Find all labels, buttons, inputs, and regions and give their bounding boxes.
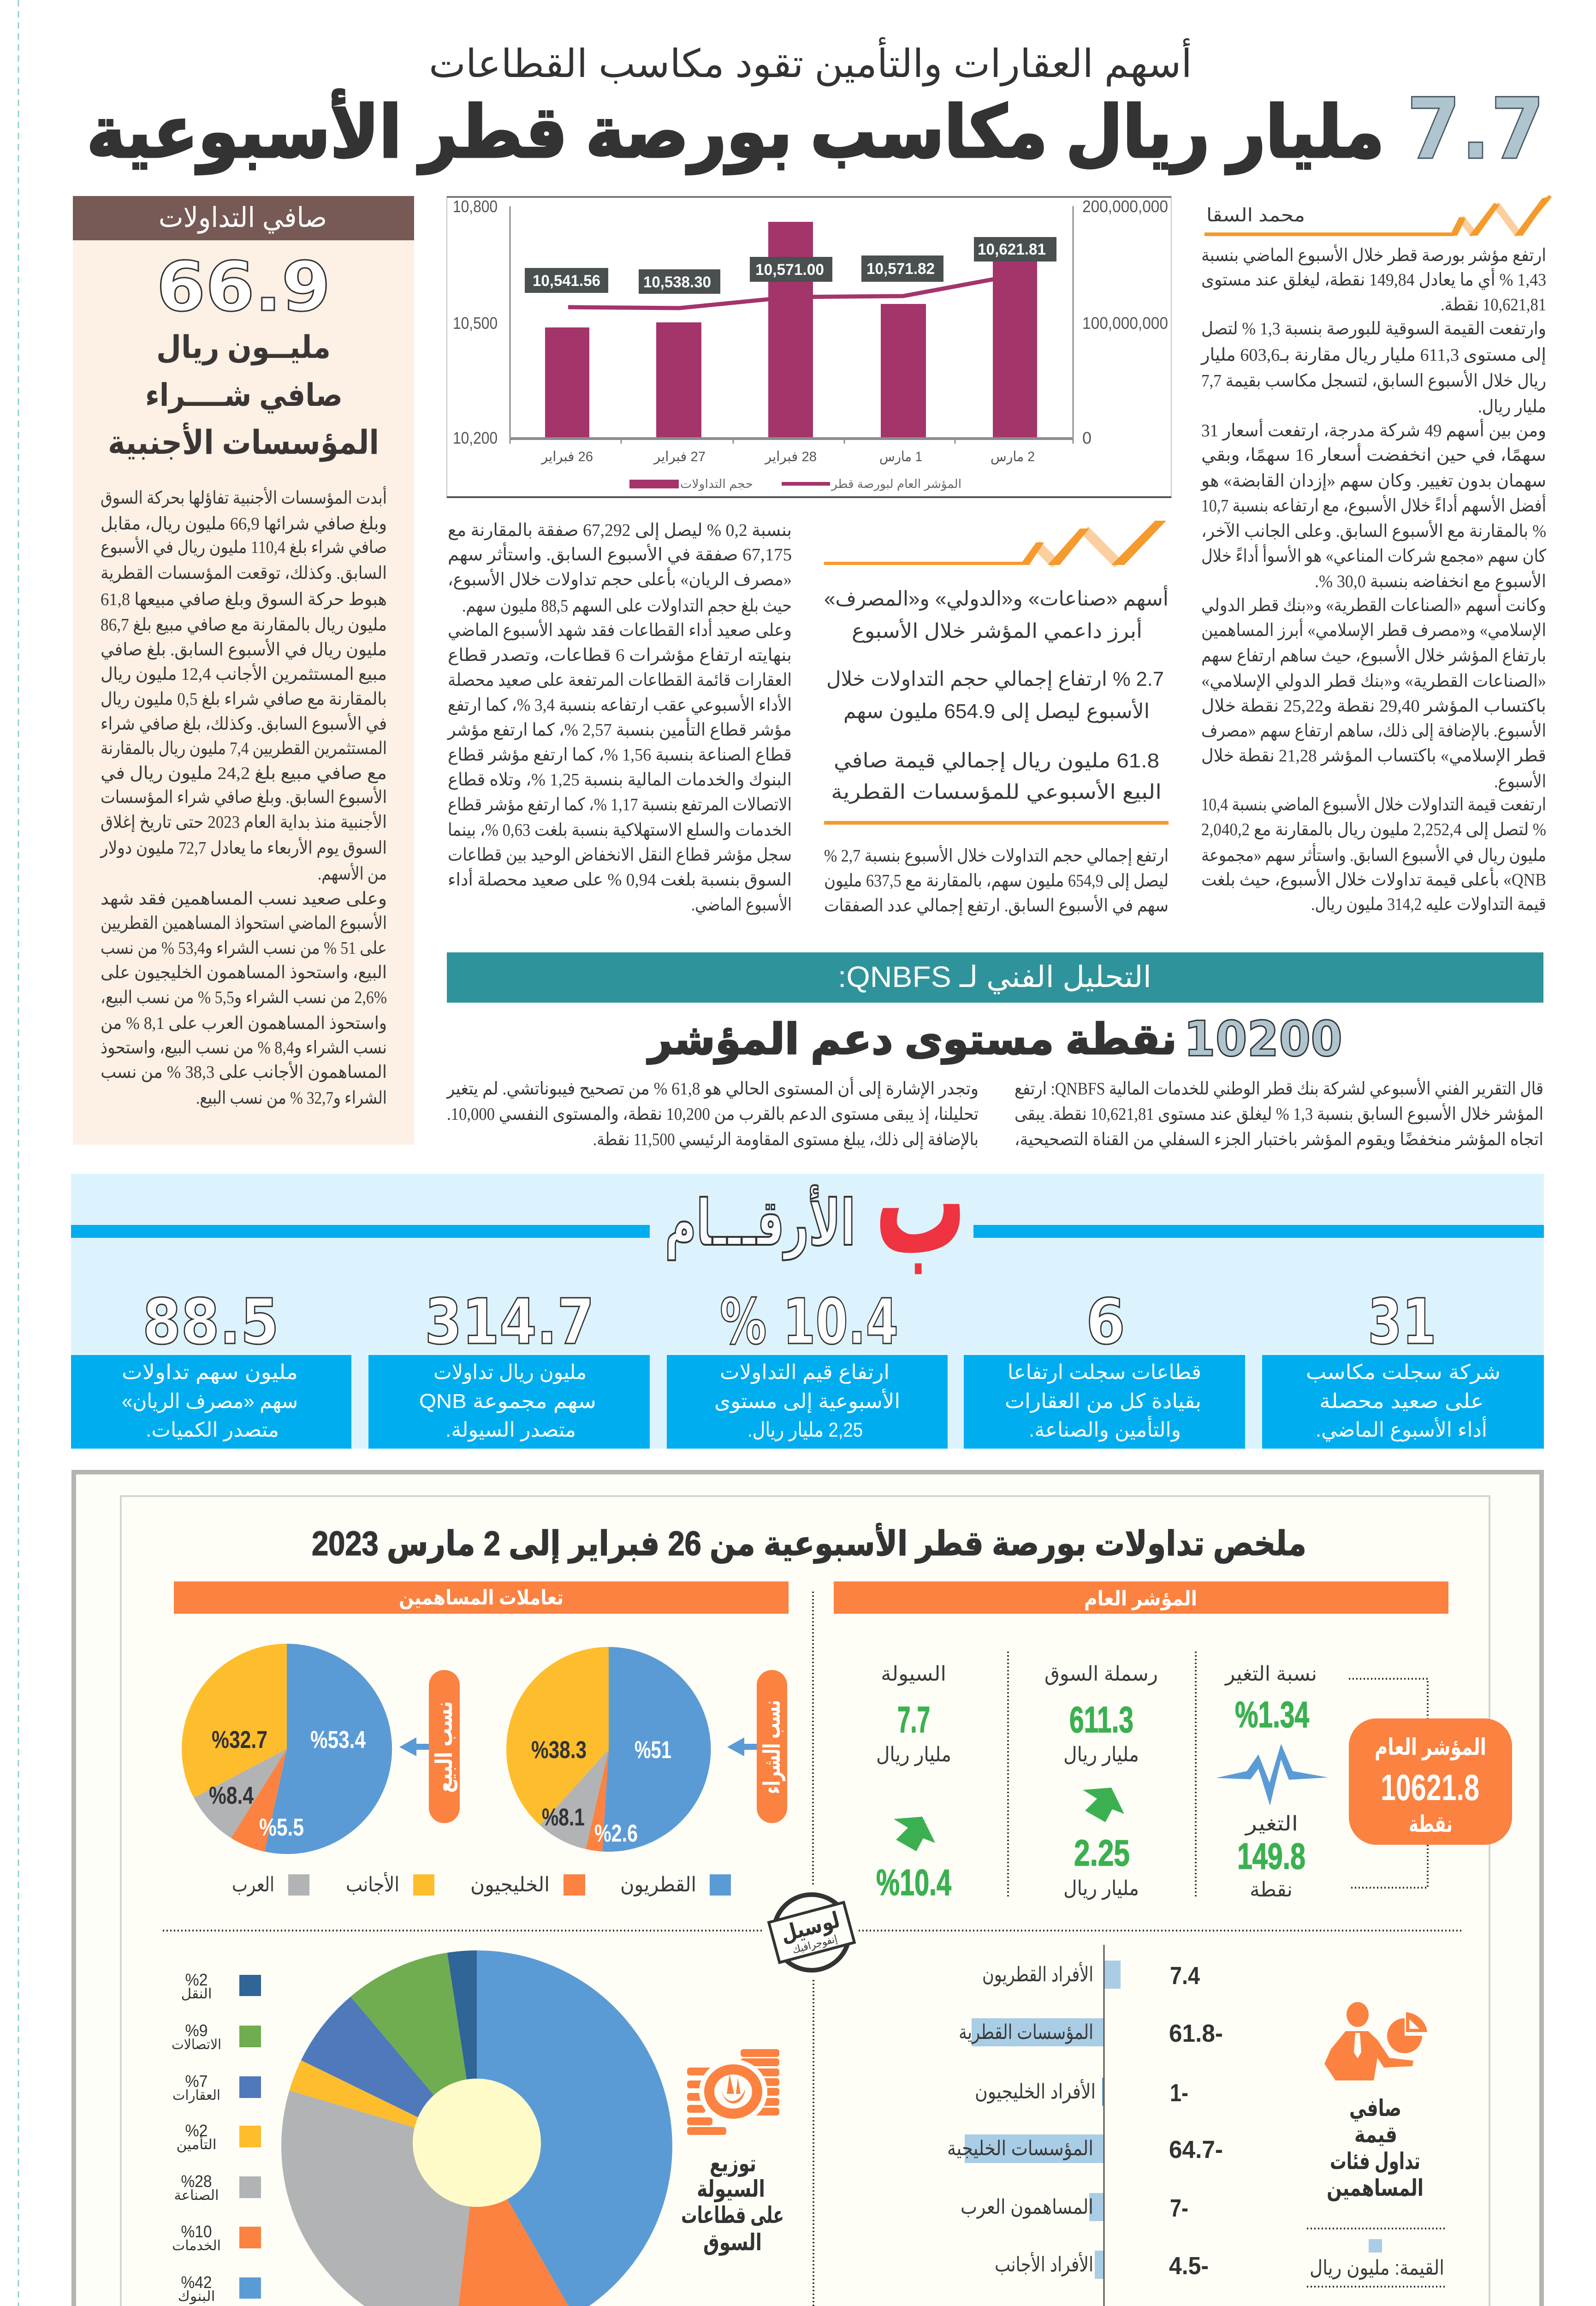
- stat numbers: % 10.4: [720, 1286, 898, 1359]
- donut caption: على قطاعات: [681, 2202, 784, 2228]
- donut caption: توزيع: [710, 2151, 756, 2177]
- main article text: باكتساب المؤشر 29,40 نقطة و25,22 نقطة خلال: [1201, 696, 1546, 716]
- column tail text: ليصل إلى 654,9 مليون سهم، بالمقارنة مع 637,5 مليون: [824, 871, 1169, 891]
- row values: 4.5-: [1169, 2252, 1209, 2280]
- main article text: مليار ريال.: [1478, 397, 1546, 416]
- donut legend: الاتصالات: [172, 2037, 221, 2052]
- arrow: buy shares: [727, 1737, 757, 1756]
- column: mid left text: البنوك والخدمات المالية بنسبة 1,25 %، وتلاه قطاع: [448, 770, 792, 790]
- column: mid left text: بنسبة 0,2 % ليصل إلى 67,292 صفقة بالمقارنة مع: [448, 521, 792, 541]
- analysis text: اتجاه المؤشر منخفضًا ويقوم المؤشر باختبار الجزء السفلي من القناة التصحيحية،: [1015, 1130, 1543, 1150]
- metric: market cap: 2.25: [1074, 1832, 1130, 1873]
- sidebar body text: واستحوذ المساهمون العرب على 8,1 % من: [101, 1014, 387, 1034]
- teal banner: [447, 952, 1543, 1003]
- row labels: المساهمون العرب: [961, 2196, 1093, 2219]
- main article text: % بالمقارنة مع الأسبوع السابق. وعلى الجانب الآخر،: [1201, 520, 1546, 541]
- row values: 1-: [1170, 2079, 1188, 2107]
- sidebar body text: بالمقارنة مع صافي شراء بلغ 0,5 مليون ريال: [101, 689, 387, 709]
- metric: change: 149.8: [1237, 1836, 1305, 1877]
- row values: 7.4: [1170, 1962, 1200, 1990]
- sidebar body text: الأسبوع السابق. وبلغ صافي شراء المؤسسات: [101, 786, 387, 808]
- sidebar body text: المساهمون الأجانب على 38,3 % من نسب: [101, 1061, 387, 1082]
- pie chart: buy shares: %51: [635, 1736, 671, 1764]
- donut legend: %7: [185, 2072, 208, 2091]
- section: by the numbers: [71, 1118, 1544, 1449]
- section: technical analysis: [446, 952, 1543, 1150]
- sidebar body text: الأسبوع الماضي استحواذ المساهمين القطريين: [101, 912, 387, 933]
- column: mid left text: حيث بلغ حجم التداولات على السهم 88,5 مليون سهم.: [462, 596, 792, 616]
- sidebar body text: صافي شراء بلغ 110,4 مليون ريال في الأسبوع: [101, 536, 387, 558]
- section title: [665, 1118, 967, 1284]
- pie chart: sell shares: %53.4: [310, 1726, 366, 1753]
- bar chart: net trading by shareholder class: [947, 1945, 1388, 2306]
- donut legend: العقارات: [172, 2088, 220, 2103]
- bar chart caption: المساهمين: [1327, 2175, 1424, 2202]
- main article text: وكانت أسهم «الصناعات القطرية» و«بنك قطر الدولي: [1201, 594, 1546, 616]
- donut legend: الصناعة: [174, 2188, 219, 2203]
- icon: businessman with pie chart: [1324, 2002, 1427, 2080]
- column tail text: [824, 844, 1169, 916]
- column: mid left text: «مصرف الريان» بأعلى حجم تداولات خلال الأسبوع،: [448, 567, 792, 590]
- bars: [965, 1961, 1388, 2306]
- column: mid left text: [447, 521, 792, 915]
- main article text: إلى مستوى 611,3 مليار ريال مقارنة بـ603,6 مليار: [1200, 345, 1546, 365]
- pie chart: sell shares: [182, 1644, 392, 1854]
- axis labels: 10,500: [453, 314, 498, 333]
- main article text: ارتفعت قيمة التداولات خلال الأسبوع الماضي بنسبة 10,4: [1201, 793, 1546, 815]
- analysis text: [446, 1077, 1543, 1150]
- chart legend: [629, 477, 961, 491]
- analysis text: المؤشر خلال الأسبوع السابق بنسبة 1,3 % ليغلق عند مستوى 10,621,81 نقطة. يبقى: [1015, 1103, 1543, 1124]
- donut legend: الخدمات: [172, 2238, 221, 2253]
- bar chart caption: صافي: [1349, 2095, 1401, 2122]
- main article text: الأسبوع.: [1494, 770, 1546, 792]
- main article text: كان سهم «مجمع شركات المناعي» هو الأسوأ أداءً خلال: [1201, 544, 1547, 566]
- row labels: الأفراد القطريون: [982, 1961, 1093, 1986]
- column tail text: سهم في الأسبوع السابق. ارتفع إجمالي عدد الصفقات: [824, 894, 1169, 916]
- stat box 88.5: متصدر الكميات.: [146, 1419, 279, 1442]
- callout: general index: [1349, 1718, 1512, 1845]
- pill: buy shares: نسب الشراء: [759, 1700, 786, 1794]
- row values: [1169, 1962, 1229, 2306]
- volume bars: [545, 222, 1037, 437]
- metric: liquidity: مليار ريال: [876, 1743, 951, 1766]
- stat box 314.7: سهم مجموعة QNB: [419, 1390, 596, 1413]
- pie legend: القطريون: [620, 1873, 696, 1896]
- value labels: 10,571.82: [866, 260, 935, 278]
- row values: 7-: [1170, 2194, 1188, 2222]
- pie legend: الخليجيون: [470, 1873, 550, 1896]
- icon: up arrow: [1083, 1788, 1124, 1822]
- main article text: 1,43 % أي ما يعادل 149,84 نقطة، ليغلق عند مستوى: [1201, 268, 1546, 290]
- stat box 10.4: [667, 1355, 948, 1449]
- stat box 6: [964, 1355, 1245, 1449]
- sidebar header: صافي التداولات: [159, 202, 327, 234]
- stat box 6: بقيادة كل من العقارات: [1005, 1390, 1201, 1413]
- pie chart: buy shares: %38.3: [531, 1736, 587, 1764]
- column: mid left text: مؤشر قطاع التأمين بنسبة 2,57 %، كما ارتفع مؤشر: [447, 718, 792, 740]
- sidebar body text: أبدت المؤسسات الأجنبية تفاؤلها بحركة السوق: [101, 486, 387, 508]
- sidebar body text: مليون ريال بالمقارنة مع صافي مبيع بلغ 86,7: [101, 615, 387, 635]
- row labels: المؤسسات الخليجية: [947, 2137, 1093, 2160]
- sidebar body text: على 51 % من نسب الشراء و53,4 % من نسب: [101, 939, 387, 958]
- stat numbers: 31: [1368, 1286, 1436, 1359]
- pie legend: [232, 1872, 731, 1896]
- sidebar headline: صافي شــــراء: [145, 378, 343, 414]
- stat box 88.5: سهم «مصرف الريان»: [122, 1390, 298, 1413]
- row labels: الأفراد الخليجيون: [975, 2079, 1096, 2104]
- main article text: QNB» بأعلى قيمة تداولات خلال الأسبوع، حيث بلغت: [1201, 868, 1546, 890]
- main article text: 10,621,81 نقطة.: [1441, 295, 1546, 315]
- main article text: ريال خلال الأسبوع السابق، لتسجل مكاسب بقيمة 7,7: [1201, 369, 1546, 391]
- pill: buy shares: [757, 1670, 787, 1823]
- summary frame: [74, 1472, 1542, 2306]
- pie chart: sell shares: %5.5: [259, 1814, 304, 1841]
- metric: market cap: مليار ريال: [1063, 1877, 1139, 1900]
- donut legend: %28: [181, 2172, 212, 2191]
- chart legend: المؤشر العام لبورصة قطر: [831, 477, 961, 491]
- main article text: الإسلامي» و«مصرف قطر الإسلامي» أبرز المساهمين: [1201, 618, 1546, 641]
- analysis text: وتجدر الإشارة إلى أن المستوى الحالي هو 61,8 % من تصحيح فيبوناتشي. لم يتغير: [446, 1077, 979, 1099]
- pie legend: الأجانب: [346, 1872, 399, 1896]
- sidebar body text: مليون ريال في الأسبوع السابق. بلغ صافي: [101, 638, 387, 660]
- analysis headline: [647, 1011, 1342, 1067]
- donut legend: %10: [181, 2222, 212, 2241]
- sidebar body text: في الأسبوع السابق. وكذلك، بلغ صافي شراء: [101, 713, 387, 734]
- author name: محمد السقا: [1206, 205, 1305, 226]
- date labels: [540, 449, 1035, 464]
- stat numbers: [142, 1286, 1436, 1359]
- pill: sell shares: [429, 1670, 460, 1823]
- arrow: sell shares: [399, 1737, 429, 1756]
- main article text: بارتفاع المؤشر خلال الأسبوع، حيث ساهم ارتفاع سهم: [1201, 644, 1546, 666]
- metric: liquidity: السيولة: [881, 1663, 946, 1686]
- value key: [1307, 2229, 1447, 2287]
- index line: [568, 275, 1015, 308]
- donut legend: [172, 1970, 261, 2304]
- main article text: أفضل الأسهم أداءً خلال الأسبوع، مع ارتفاعه بنسبة 10,7: [1201, 494, 1546, 516]
- date labels: 27 فبراير: [653, 449, 706, 464]
- pie chart: buy shares: [506, 1647, 711, 1852]
- icon: coin stacks: [687, 2049, 779, 2135]
- axis labels: 10,200: [453, 428, 498, 447]
- donut legend: %2: [185, 1970, 208, 1989]
- pie legend: العرب: [232, 1873, 274, 1896]
- stat box 6: والتأمين والصناعة.: [1029, 1415, 1181, 1442]
- metric: market cap: [1044, 1663, 1158, 1900]
- stat box 88.5: مليون سهم تداولات: [122, 1361, 298, 1384]
- main article text: ومن بين أسهم 49 شركة مدرجة، ارتفعت أسعار 31: [1201, 419, 1546, 441]
- row labels: [947, 1961, 1096, 2306]
- metric: change: نسبة التغير: [1224, 1663, 1317, 1686]
- donut caption: [681, 2151, 784, 2256]
- sidebar body text: نسب الشراء و8,4 % من نسب البيع، واستحوذ: [101, 1038, 387, 1058]
- sidebar body text: البيع، واستحوذ المساهمون الخليجيون على: [101, 963, 387, 983]
- date labels: 26 فبراير: [540, 449, 593, 464]
- icon: rising zigzag: [824, 521, 1166, 565]
- bar chart caption: [1327, 2095, 1424, 2202]
- pie chart: buy shares: %8.1: [542, 1804, 585, 1831]
- stat box 6: قطاعات سجلت ارتفاعا: [1008, 1361, 1201, 1384]
- metric: market cap: رسملة السوق: [1044, 1663, 1158, 1686]
- metric: change: التغير: [1245, 1813, 1298, 1836]
- stat box 10.4: الأسبوعية إلى مستوى: [714, 1388, 900, 1413]
- date labels: 2 مارس: [991, 449, 1035, 464]
- main title: مليار ريال مكاسب بورصة قطر الأسبوعية: [87, 89, 1384, 174]
- main article text: الأسبوع مع انخفاضه بنسبة 30,0 %.: [1315, 570, 1546, 592]
- main article text: قيمة التداولات عليه 314,2 مليون ريال.: [1311, 895, 1546, 915]
- sidebar body text: الشراء و32,7 % من نسب البيع.: [196, 1088, 387, 1108]
- icon: rising zigzag: [1204, 196, 1550, 236]
- main article text: مليون ريال في الأسبوع السابق. واستأثر سهم «مجموعة: [1201, 843, 1546, 866]
- value labels: 10,621.81: [978, 241, 1046, 258]
- section background: [71, 1174, 1544, 1449]
- axis labels: 0: [1082, 428, 1092, 447]
- bar chart caption: تداول فئات: [1330, 2148, 1420, 2175]
- sidebar body text: الأجنبية منذ بداية العام 2023 حتى تاريخ إغلاق: [101, 811, 387, 832]
- column: mid left text: الخدمات والسلع الاستهلاكية بنسبة بلغت 0,63 %، بينما: [448, 820, 792, 840]
- stat box 31: أداء الأسبوع الماضي.: [1316, 1416, 1487, 1442]
- value key: القيمة: مليون ريال: [1310, 2257, 1444, 2280]
- metric: liquidity: %10.4: [876, 1862, 951, 1903]
- column: mid left text: العقارات قائمة القطاعات المرتفعة على صعيد محصلة: [448, 671, 792, 690]
- header: general index: المؤشر العام: [1084, 1587, 1197, 1611]
- pie chart: sell shares: %8.4: [209, 1782, 254, 1809]
- pie chart: sell shares: %32.7: [212, 1726, 267, 1753]
- stat box 31: شركة سجلت مكاسب: [1306, 1361, 1501, 1384]
- value labels: 10,538.30: [643, 273, 711, 291]
- column: mid left text: الأداء الأسبوعي عقب ارتفاعه بنسبة 3,4 %، كما ارتفع: [448, 694, 792, 715]
- column: mid left text: وعلى صعيد أداء القطاعات فقد شهد الأسبوع الماضي: [448, 618, 792, 641]
- bar chart caption: قيمة: [1354, 2122, 1397, 2147]
- analysis headline: 10200: [1184, 1011, 1342, 1067]
- column tail text: ارتفع إجمالي حجم التداولات خلال الأسبوع بنسبة 2,7 %: [824, 844, 1169, 866]
- donut caption: السوق: [703, 2229, 762, 2256]
- axis labels: 200,000,000: [1082, 197, 1168, 216]
- axis labels: 100,000,000: [1082, 314, 1168, 333]
- sidebar body text: السابق. وكذلك، توقعت المؤسسات القطرية: [101, 564, 387, 583]
- main title number: 7.7: [1406, 80, 1545, 178]
- stat box 88.5: [71, 1355, 351, 1449]
- main article text: قطر الإسلامي» باكتساب المؤشر 21,28 نقطة خلال: [1201, 746, 1546, 766]
- pill: sell shares: نسب البيع: [431, 1701, 458, 1793]
- metric: market cap: 611.3: [1069, 1699, 1133, 1740]
- highlight text: 2.7 % ارتفاع إجمالي حجم التداولات خلال: [826, 668, 1164, 691]
- header: shareholder transactions: [174, 1581, 789, 1614]
- donut legend: التأمين: [176, 2134, 217, 2152]
- sidebar body text: مبيع المستثمرين الأجانب 12,4 مليون ريال: [101, 663, 387, 684]
- pie chart: buy shares: %2.6: [594, 1820, 638, 1847]
- icon: pulse: [1216, 1744, 1328, 1806]
- sidebar header: [73, 196, 414, 240]
- sidebar headline: مليــون ريال: [156, 330, 331, 366]
- panel: net trading sidebar: [73, 196, 414, 1145]
- sidebar body text: المستثمرين القطريين 7,4 مليون ريال بالمقارنة: [101, 739, 387, 759]
- main article text: «الصناعات القطرية» و«بنك قطر الدولي الإسلامي»: [1201, 672, 1546, 691]
- stat box 10.4: 2,25 مليار ريال.: [748, 1419, 863, 1442]
- donut chart: liquidity distribution: [281, 1950, 672, 2306]
- stat box 314.7: [368, 1355, 650, 1449]
- stamp: Lusail infographic: إنفوجرافيك: [791, 1933, 839, 1956]
- column: mid left text: قطاع الصناعة بنسبة 1,56 %، كما ارتفع مؤشر قطاع: [448, 745, 792, 765]
- summary title: ملخص تداولات بورصة قطر الأسبوعية من 26 فبراير إلى 2 مارس 2023: [312, 1523, 1306, 1564]
- chart: index and trading volume: [447, 196, 1171, 498]
- sidebar body text: من الأسهم.: [318, 862, 387, 884]
- sidebar body text: هبوط حركة السوق وبلغ صافي مبيعها 61,8: [101, 590, 387, 610]
- main article text: ارتفع مؤشر بورصة قطر خلال الأسبوع الماضي بنسبة: [1201, 244, 1546, 266]
- metric: change: %1.34: [1235, 1694, 1309, 1735]
- row values: 64.7-: [1169, 2136, 1223, 2163]
- highlight text: البيع الأسبوعي للمؤسسات القطرية: [831, 779, 1162, 804]
- highlight text: الأسبوع ليصل إلى 654.9 مليون سهم: [843, 698, 1150, 723]
- sidebar headline: [108, 330, 379, 462]
- metric: liquidity: [876, 1663, 951, 1903]
- column: mid left text: السوق بنسبة بلغت 0,94 % على صعيد محصلة أداء: [448, 868, 792, 890]
- main article text: سهمان بدون تغيير. وكان سهم «إزدان القابضة» هو: [1200, 471, 1546, 491]
- header: shareholder transactions: تعاملات المساهمين: [399, 1587, 564, 1610]
- highlight text: 61.8 مليون ريال إجمالي قيمة صافي: [834, 749, 1159, 773]
- stat box 314.7: مليون ريال تداولات: [433, 1361, 587, 1384]
- donut legend: %42: [181, 2273, 212, 2292]
- column: mid left text: الاتصالات المرتفع بنسبة 1,17 %، كما ارتفع مؤشر قطاع: [448, 795, 792, 815]
- chart frame: [447, 196, 1171, 498]
- sidebar body text: [100, 486, 387, 1108]
- metric: market cap: مليار ريال: [1063, 1743, 1139, 1766]
- icon: up arrow: [894, 1817, 935, 1851]
- analysis text: قال التقرير الفني الأسبوعي لشركة بنك قطر الوطني للخدمات المالية QNBFS: ارتفع: [1015, 1077, 1543, 1099]
- row labels: الأفراد الأجانب: [995, 2252, 1093, 2276]
- row labels: المؤسسات القطرية: [959, 2021, 1093, 2044]
- stamp: Lusail infographic: لوسيل: [778, 1908, 842, 1947]
- analysis headline: نقطة مستوى دعم المؤشر: [647, 1016, 1177, 1064]
- section title: الأرقـــام: [665, 1185, 855, 1260]
- callout: general index: نقطة: [1409, 1811, 1453, 1837]
- axis labels: [453, 197, 1168, 447]
- panel: highlights: [824, 521, 1169, 916]
- donut legend: البنوك: [178, 2289, 215, 2304]
- donut legend: %2: [185, 2121, 208, 2140]
- panel: weekly summary: [74, 1472, 1542, 2306]
- donut legend: %9: [185, 2021, 208, 2040]
- stat numbers: 6: [1086, 1286, 1125, 1359]
- sidebar body text: وعلى صعيد نسب المساهمين فقد شهد: [101, 889, 387, 909]
- sidebar headline: المؤسسات الأجنبية: [108, 422, 379, 462]
- highlight text: [824, 585, 1169, 804]
- stat numbers: 314.7: [425, 1286, 594, 1359]
- stat box 314.7: متصدر السيولة.: [445, 1419, 576, 1442]
- callout: general index: 10621.8: [1381, 1767, 1479, 1808]
- stat box 10.4: ارتفاع قيم التداولات: [720, 1361, 890, 1384]
- axis labels: 10,800: [453, 197, 498, 216]
- column: mid left text: 67,175 صفقة في الأسبوع السابق. واستأثر سهم: [448, 542, 792, 565]
- date labels: 28 فبراير: [764, 449, 817, 464]
- column: mid left text: الأسبوع الماضي.: [691, 893, 792, 915]
- metric: liquidity: 7.7: [897, 1699, 930, 1740]
- value labels: [525, 237, 1056, 294]
- donut legend: النقل: [181, 1986, 212, 2002]
- main article text: سهمًا، في حين انخفضت أسعار 16 سهمًا، وبقي: [1201, 443, 1546, 465]
- column: mid left text: سجل مؤشر قطاع النقل الانخفاض الوحيد بين قطاعات: [448, 845, 792, 865]
- main article text: [1200, 244, 1547, 915]
- value labels: 10,571.00: [755, 261, 824, 279]
- subtitle: أسهم العقارات والتأمين تقود مكاسب القطاعات: [429, 37, 1192, 87]
- stat box 31: على صعيد محصلة: [1319, 1390, 1484, 1413]
- sidebar background: [73, 240, 414, 1145]
- main article text: الأسبوع. بالإضافة إلى ذلك، ساهم ارتفاع سهم «مصرف: [1201, 719, 1546, 741]
- header: general index: [834, 1581, 1448, 1614]
- sidebar body text: 2,6% من نسب الشراء و5,5 % من نسب البيع،: [101, 988, 387, 1008]
- sidebar body text: مع صافي مبيع بلغ 24,2 مليون ريال في: [101, 764, 387, 784]
- metric: change: نقطة: [1250, 1878, 1293, 1901]
- analysis text: تحليلنا، إذ يبقى مستوى الدعم بالقرب من 10,200 نقطة، والمستوى النفسي 10,000.: [447, 1105, 979, 1124]
- column: author and main text: [1200, 196, 1550, 915]
- summary content: [163, 1523, 1512, 2306]
- analysis text: بالإضافة إلى ذلك، يبلغ مستوى المقاومة الرئيسي 11,500 نقطة.: [593, 1130, 979, 1150]
- metric: change: [1216, 1663, 1328, 1901]
- row values: 61.8-: [1169, 2020, 1223, 2047]
- chart legend: حجم التداولات: [680, 477, 753, 491]
- donut caption: السيولة: [697, 2176, 765, 2203]
- value labels: 10,541.56: [533, 272, 600, 290]
- date labels: 1 مارس: [879, 449, 922, 464]
- main article text: وارتفعت القيمة السوقية للبورصة بنسبة 1,3 % لتصل: [1201, 319, 1546, 339]
- big number 66.9: 66.9: [156, 247, 331, 327]
- highlight text: أبرز داعمي المؤشر خلال الأسبوع: [852, 618, 1142, 643]
- sidebar body text: السوق يوم الأربعاء ما يعادل 72,7 مليون دولار: [100, 837, 387, 858]
- teal banner: التحليل الفني لـ QNBFS:: [838, 960, 1151, 994]
- highlight text: أسهم «صناعات» و«الدولي» و«المصرف»: [824, 585, 1169, 611]
- stamp: Lusail infographic: [769, 1895, 854, 1970]
- main article text: % لتصل إلى 2,252,4 مليون ريال بالمقارنة مع 2,040,2: [1201, 820, 1546, 840]
- stat box 31: [1262, 1355, 1544, 1449]
- callout: general index: المؤشر العام: [1375, 1734, 1486, 1761]
- section title: ب: [874, 1118, 967, 1284]
- column: mid left text: بنهايته ارتفاع مؤشرات 6 قطاعات، وتصدر قطاع: [448, 646, 792, 666]
- title block: [87, 37, 1545, 178]
- sidebar body text: وبلغ صافي شرائها 66,9 مليون ريال، مقابل: [101, 514, 387, 534]
- stat numbers: 88.5: [142, 1286, 279, 1359]
